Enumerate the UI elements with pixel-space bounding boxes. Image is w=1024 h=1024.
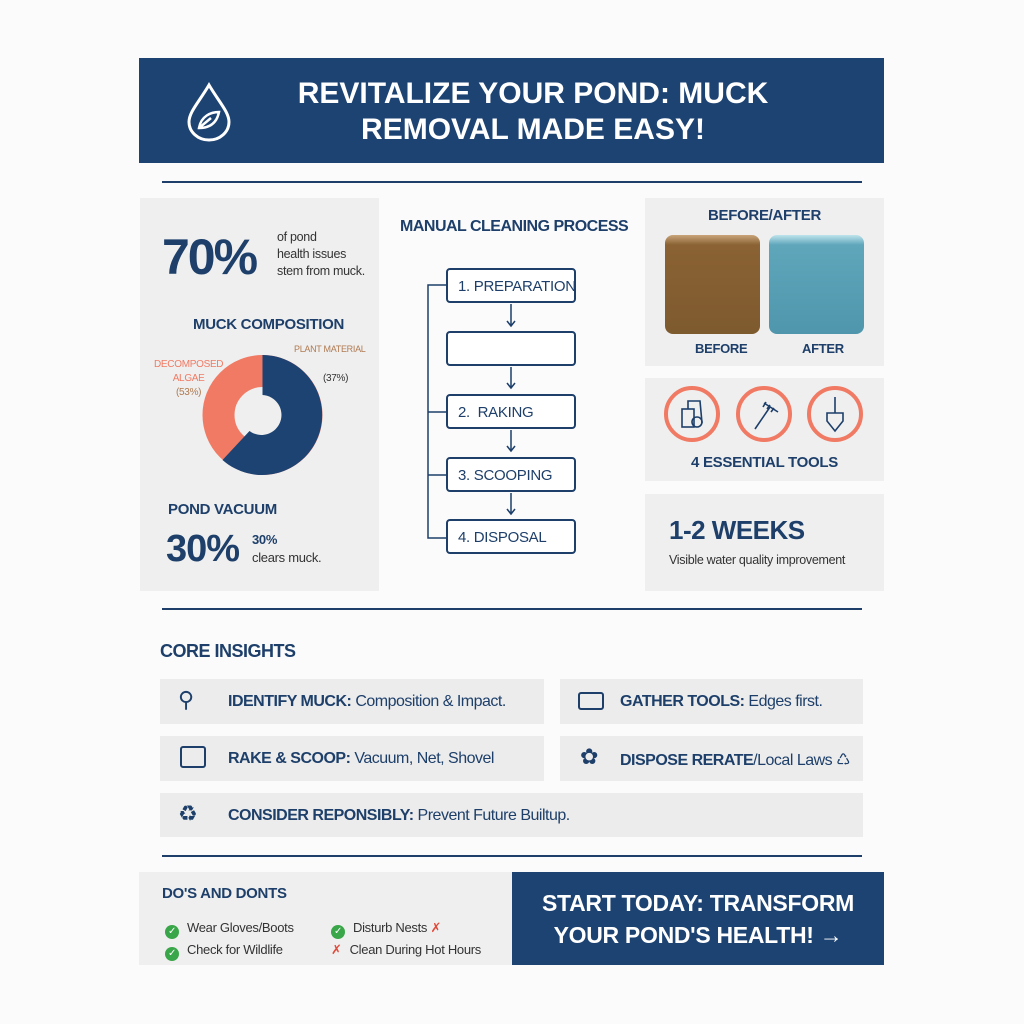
panel: stats left: DECOMPOSED: [154, 359, 223, 370]
panel: stats left: ALGAE: [173, 373, 205, 384]
insight: gather tools: [560, 679, 863, 724]
panel: dos and donts: [139, 872, 512, 965]
donut chart: [202, 355, 322, 475]
panel: dos and donts: DO'S AND DONTS: [162, 885, 287, 902]
call to action: [512, 872, 884, 965]
icon: water drop: [188, 82, 230, 142]
panel: timeline: Visible water quality improvement: [669, 553, 845, 567]
panel: stats left: 30%: [252, 532, 277, 547]
panel: tools: [645, 378, 884, 481]
insight: rake & scoop: [160, 736, 544, 781]
panel: timeline: [645, 494, 884, 591]
title: [298, 77, 768, 146]
panel: stats left: PLANT MATERIAL: [294, 344, 366, 354]
panel: dos and donts: Wear Gloves/Boots: [187, 920, 294, 935]
title: REMOVAL MADE EASY!: [361, 113, 705, 146]
process flowchart: [427, 284, 516, 539]
panel: stats left: of pond: [277, 230, 317, 244]
panel: stats left: health issues: [277, 247, 346, 261]
insight: gather tools: GATHER TOOLS: Edges first.: [620, 693, 822, 710]
heading: core insights: CORE INSIGHTS: [160, 641, 296, 661]
call to action: START TODAY: TRANSFORM: [542, 890, 854, 916]
panel: stats left: clears muck.: [252, 550, 321, 565]
panel: dos and donts: ✓: [168, 926, 176, 937]
insight: consider responsibly: CONSIDER REPONSIBLY: Prevent Future Builtup.: [228, 807, 570, 824]
insight: consider responsibly: [160, 793, 863, 837]
stat pond vacuum: POND VACUUM: [168, 501, 277, 518]
panel: before/after: BEFORE/AFTER: [708, 207, 821, 224]
call to action: YOUR POND'S HEALTH! →: [554, 922, 842, 948]
panel: stats left: (53%): [176, 387, 201, 398]
panel: stats left: [140, 198, 379, 591]
panel: stats left: (37%): [323, 373, 348, 384]
panel: stats left: stem from muck.: [277, 264, 365, 278]
panel: dos and donts: Disturb Nests ✗: [353, 920, 441, 935]
heading: muck composition: MUCK COMPOSITION: [193, 316, 344, 333]
panel: dos and donts: Check for Wildlife: [187, 942, 283, 957]
insight: consider responsibly: ♻: [178, 801, 197, 826]
insight: dispose: DISPOSE RERATE/Local Laws ♺: [620, 752, 850, 769]
header banner: [139, 58, 884, 163]
insight: dispose: [560, 736, 863, 781]
heading: manual cleaning process: MANUAL CLEANING PROCESS: [400, 218, 628, 235]
title: REVITALIZE YOUR POND: MUCK: [298, 77, 768, 110]
panel: before/after: [645, 198, 884, 366]
panel: dos and donts: ✓: [168, 948, 176, 959]
text: 3. SCOOPING: [458, 467, 552, 484]
panel: dos and donts: ✓: [334, 926, 342, 937]
insight: identify muck: IDENTIFY MUCK: Composition & Impact.: [228, 693, 506, 710]
stat 70%: 70%: [162, 229, 256, 285]
insight: dispose: ✿: [580, 744, 598, 769]
panel: timeline: 1-2 WEEKS: [669, 515, 805, 545]
insight: identify muck: ⚲: [178, 687, 194, 712]
text: 2. RAKING: [458, 404, 533, 421]
panel: before/after: BEFORE: [695, 341, 747, 356]
insight: rake & scoop: RAKE & SCOOP: Vacuum, Net, Shovel: [228, 750, 494, 767]
panel: dos and donts: ✗ Clean During Hot Hours: [331, 942, 481, 957]
insight: identify muck: [160, 679, 544, 724]
panel: stats left: 30%: [166, 528, 239, 570]
text: 1. PREPARATION: [458, 278, 576, 295]
panel: tools: 4 ESSENTIAL TOOLS: [691, 454, 838, 471]
panel: before/after: AFTER: [802, 341, 844, 356]
text: 4. DISPOSAL: [458, 529, 546, 546]
